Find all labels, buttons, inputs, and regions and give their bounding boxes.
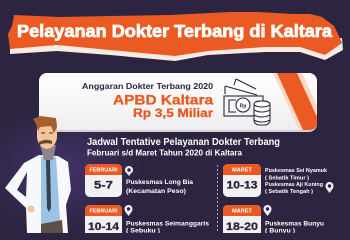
schedule item: 18-20 Maret: 18-20: [226, 221, 258, 233]
schedule item: 5-7 Februari: FEBRUARI: [90, 168, 118, 174]
tie: [46, 160, 51, 212]
schedule item: 18-20 Maret: MARET: [232, 208, 253, 214]
schedule item: 10-13 Maret: Puskesmas Sei Nyamuk: [265, 168, 327, 174]
icon: pin: [124, 205, 132, 216]
illustration: doctor: [5, 116, 71, 233]
moustache: [39, 140, 52, 145]
hair: [33, 116, 57, 133]
icon: pin: [264, 205, 272, 216]
schedule item: 10-13 Maret: Puskesmas Aji Kuning: [265, 182, 323, 188]
decorative orange stripe: [273, 73, 317, 130]
schedule item: 5-7 Februari: 5-7: [94, 180, 113, 192]
schedule item: 10-13 Maret: [223, 164, 334, 197]
shirt: [41, 157, 60, 224]
budget source: APBD Kaltara: [113, 92, 214, 108]
icon: money and coins: Rp: [240, 104, 246, 110]
schedule item: 18-20 Maret: [223, 205, 324, 234]
icon: pin: [125, 166, 133, 176]
white coat: [5, 155, 71, 233]
eyes: [41, 132, 53, 134]
title text: Pelayanan Dokter Terbang di Kaltara: [17, 21, 332, 41]
schedule item: 10-14 Februari: [85, 205, 209, 234]
budget amount: Rp 3,5 Miliar: [133, 106, 213, 120]
schedule item: 5-7 Februari: (Kecamatan Peso): [126, 188, 186, 195]
neck and head: [40, 145, 56, 160]
schedule item: 10-13 Maret: MARET: [232, 168, 253, 174]
icon: money and coins: [224, 79, 270, 125]
schedule item: 18-20 Maret: Puskesmas Bunyu: [265, 220, 324, 228]
schedule item: 10-13 Maret: 10-13: [226, 180, 258, 192]
schedule heading: Jadwal Tentative Pelayanan Dokter Terbang: [87, 136, 280, 148]
schedule item: 10-14 Februari: FEBRUARI: [90, 208, 118, 214]
schedule item: 5-7 Februari: Puskesmas Long Bia: [126, 179, 193, 186]
schedule item: 10-13 Maret: ( Sebatik Timur ): [265, 176, 309, 182]
divider: [216, 165, 218, 233]
title banner: [8, 12, 343, 61]
budget label: Anggaran Dokter Terbang 2020: [82, 81, 213, 91]
hand: [28, 206, 34, 212]
schedule item: 10-13 Maret: ( Sebatik Tengah ): [265, 189, 313, 195]
schedule subheading: Februari s/d Maret Tahun 2020 di Kaltara: [87, 148, 242, 158]
schedule item: 10-14 Februari: 10-14: [88, 221, 120, 233]
schedule item: 5-7 Februari: [85, 164, 193, 197]
panel: budget card: [39, 73, 317, 132]
icon: pin: [326, 182, 334, 193]
schedule item: 10-14 Februari: Puskesmas Seimanggaris: [126, 220, 209, 228]
trousers: [41, 220, 63, 233]
